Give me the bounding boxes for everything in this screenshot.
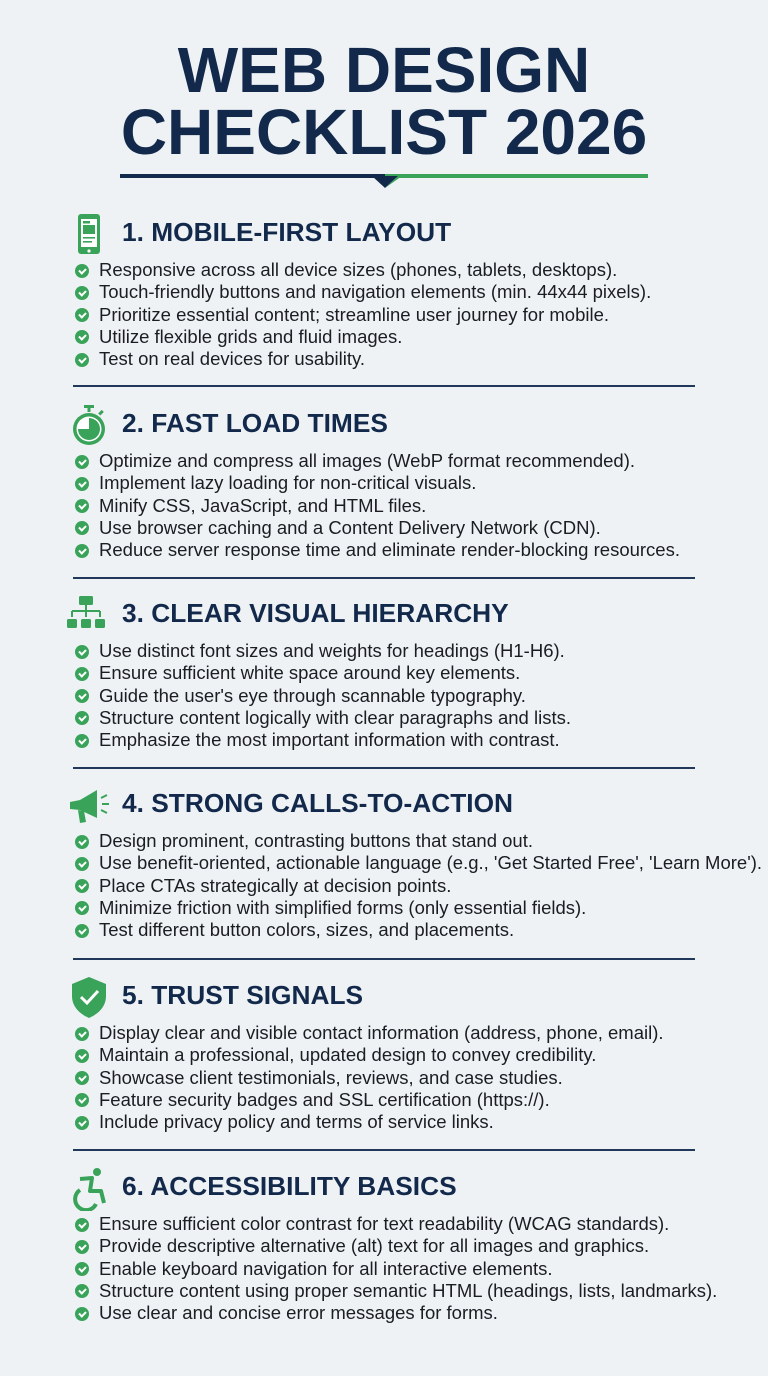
icon: accessibility: [73, 1168, 106, 1211]
checklist: Emphasize the most important information with contrast.: [99, 729, 560, 750]
checklist: Structure content using proper semantic HTML (headings, lists, landmarks).: [99, 1280, 717, 1301]
checklist: Enable keyboard navigation for all interactive elements.: [99, 1258, 553, 1279]
checklist: Minimize friction with simplified forms (only essential fields).: [99, 897, 586, 918]
checklist: Use benefit-oriented, actionable language (e.g., 'Get Started Free', 'Learn More').: [99, 852, 762, 873]
checklist: Showcase client testimonials, reviews, and case studies.: [99, 1067, 563, 1088]
heading: 5. TRUST SIGNALS: [122, 980, 363, 1010]
section 1: mobile-first: [75, 214, 651, 369]
checklist: Test different button colors, sizes, and placements.: [99, 919, 514, 940]
title: [121, 34, 647, 168]
checklist: Test on real devices for usability.: [99, 348, 365, 369]
icon: stopwatch: [73, 405, 105, 445]
checklist: [75, 259, 651, 369]
heading: 4. STRONG CALLS-TO-ACTION: [122, 788, 513, 818]
section 5: trust: [72, 977, 664, 1132]
title underline: [120, 174, 648, 188]
section 4: CTAs: [70, 788, 762, 940]
section 3: hierarchy: [67, 596, 571, 750]
heading: 3. CLEAR VISUAL HIERARCHY: [122, 598, 509, 628]
checklist: [75, 1022, 664, 1132]
icon: sitemap: [67, 596, 105, 628]
checklist: Minify CSS, JavaScript, and HTML files.: [99, 495, 426, 516]
checklist: Ensure sufficient color contrast for text readability (WCAG standards).: [99, 1213, 669, 1234]
checklist: Display clear and visible contact information (address, phone, email).: [99, 1022, 664, 1043]
checklist: Prioritize essential content; streamline user journey for mobile.: [99, 304, 609, 325]
checklist: [75, 1213, 717, 1323]
checklist: Design prominent, contrasting buttons that stand out.: [99, 830, 533, 851]
title: WEB DESIGN: [178, 34, 590, 106]
icon: phone: [78, 214, 100, 254]
section 6: accessibility: [73, 1168, 717, 1323]
checklist: [75, 450, 680, 560]
checklist: Use browser caching and a Content Delivery Network (CDN).: [99, 517, 601, 538]
checklist: Include privacy policy and terms of service links.: [99, 1111, 494, 1132]
checklist: Use clear and concise error messages for forms.: [99, 1302, 498, 1323]
checklist: Use distinct font sizes and weights for headings (H1-H6).: [99, 640, 565, 661]
heading: 2. FAST LOAD TIMES: [122, 408, 388, 438]
checklist: Ensure sufficient white space around key elements.: [99, 662, 520, 683]
checklist: Implement lazy loading for non-critical visuals.: [99, 472, 476, 493]
checklist: Utilize flexible grids and fluid images.: [99, 326, 402, 347]
checklist: Place CTAs strategically at decision points.: [99, 875, 451, 896]
heading: 1. MOBILE-FIRST LAYOUT: [122, 217, 451, 247]
checklist: Maintain a professional, updated design to convey credibility.: [99, 1044, 596, 1065]
section 2: fast load: [73, 405, 680, 560]
checklist: Structure content logically with clear paragraphs and lists.: [99, 707, 571, 728]
icon: megaphone: [70, 790, 109, 823]
checklist: [75, 830, 762, 940]
checklist: Touch-friendly buttons and navigation elements (min. 44x44 pixels).: [99, 281, 651, 302]
heading: 6. ACCESSIBILITY BASICS: [122, 1171, 457, 1201]
title: CHECKLIST 2026: [121, 96, 647, 168]
checklist: Provide descriptive alternative (alt) text for all images and graphics.: [99, 1235, 649, 1256]
checklist: [75, 640, 571, 750]
checklist: Feature security badges and SSL certification (https://).: [99, 1089, 550, 1110]
checklist: Guide the user's eye through scannable typography.: [99, 685, 526, 706]
checklist: Reduce server response time and eliminate render-blocking resources.: [99, 539, 680, 560]
checklist: Responsive across all device sizes (phones, tablets, desktops).: [99, 259, 617, 280]
checklist: Optimize and compress all images (WebP format recommended).: [99, 450, 635, 471]
icon: shield: [72, 977, 106, 1018]
